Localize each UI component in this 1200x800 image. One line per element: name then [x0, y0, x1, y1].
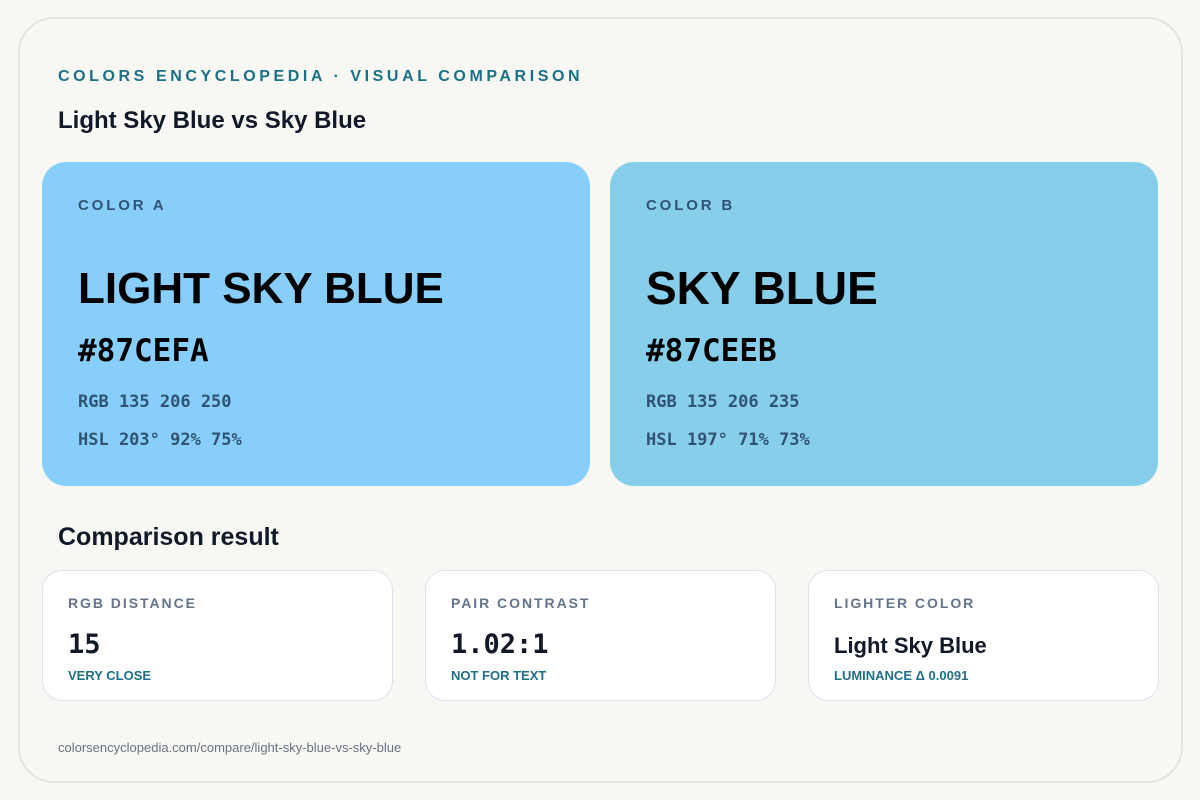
color A label: COLOR A: [78, 197, 167, 214]
footer URL: colorsencyclopedia.com/compare/light-sky-blue-vs-sky-blue: [58, 740, 401, 755]
color A RGB: RGB 135 206 250: [78, 392, 232, 412]
RGB distance label: RGB DISTANCE: [68, 595, 197, 611]
color B RGB: RGB 135 206 235: [646, 392, 800, 412]
eyebrow: COLORS ENCYCLOPEDIA · VISUAL COMPARISON: [58, 68, 583, 85]
section heading: Comparison result: [58, 523, 279, 551]
pair contrast note: NOT FOR TEXT: [451, 668, 546, 683]
color B label: COLOR B: [646, 197, 735, 214]
panel: color A: [42, 162, 590, 486]
card: lighter color: [808, 570, 1158, 700]
pair contrast label: PAIR CONTRAST: [451, 595, 590, 611]
lighter color label: LIGHTER COLOR: [834, 595, 975, 611]
RGB distance note: VERY CLOSE: [68, 668, 151, 683]
color B HSL: HSL 197° 71% 73%: [646, 430, 810, 450]
panel: color B: [610, 162, 1158, 486]
color A name: LIGHT SKY BLUE: [78, 264, 444, 313]
lighter color value: Light Sky Blue: [834, 633, 987, 658]
color A HSL: HSL 203° 92% 75%: [78, 430, 242, 450]
color B name: SKY BLUE: [646, 262, 878, 314]
color A hex: #87CEFA: [78, 333, 209, 369]
lighter color note: LUMINANCE Δ 0.0091: [834, 668, 968, 683]
card: pair contrast: [424, 570, 776, 700]
RGB distance value: 15: [68, 629, 101, 660]
card: RGB distance: [42, 570, 392, 700]
color B hex: #87CEEB: [646, 333, 777, 369]
title: Light Sky Blue vs Sky Blue: [58, 107, 366, 134]
pair contrast value: 1.02:1: [451, 629, 549, 660]
